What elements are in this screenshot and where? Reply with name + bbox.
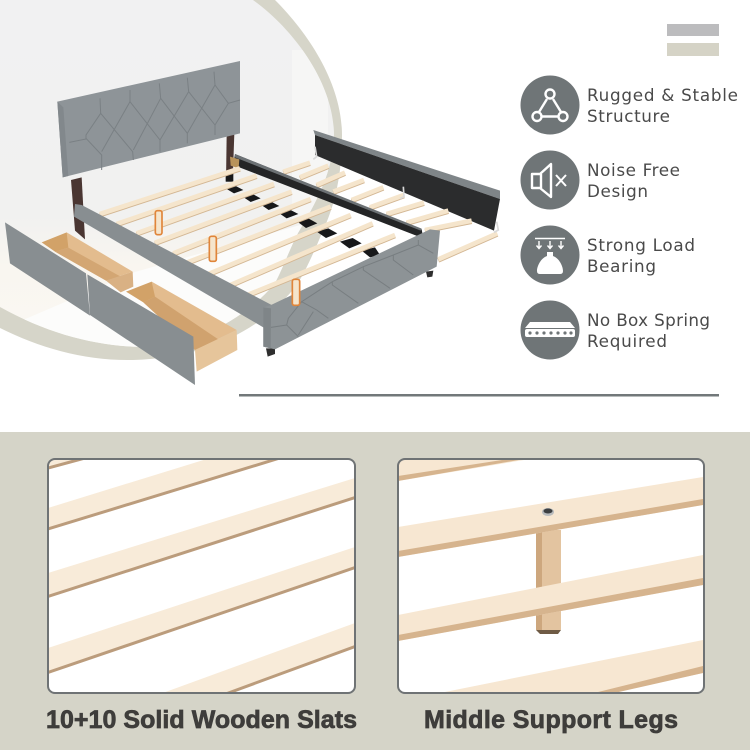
middle support leg outlines bbox=[155, 211, 300, 305]
horizontal rule bbox=[239, 394, 719, 396]
icon: mattress bbox=[520, 300, 580, 360]
near half slats bbox=[100, 168, 395, 297]
far side rail bbox=[313, 130, 500, 231]
footboard bbox=[263, 229, 440, 349]
panel: wooden slats bbox=[48, 457, 355, 694]
label: Noise Free bbox=[587, 160, 680, 180]
label: Strong Load bbox=[587, 235, 695, 255]
decorative backdrop circle bbox=[0, 0, 342, 360]
right drawer bbox=[87, 274, 237, 385]
middle rail bbox=[230, 154, 423, 238]
feature: rugged and stable bbox=[520, 76, 738, 134]
headboard bbox=[57, 61, 240, 177]
label: Rugged & Stable bbox=[587, 85, 738, 105]
label: Bearing bbox=[587, 256, 656, 276]
near side rail bbox=[74, 204, 272, 328]
far rail brackets bbox=[313, 147, 498, 232]
caption: wooden slats: 10+10 Solid Wooden Slats bbox=[46, 706, 357, 734]
bed illustration bbox=[5, 61, 500, 385]
rear foot bbox=[426, 271, 433, 277]
left headboard post bbox=[71, 177, 85, 239]
icon: muted speaker bbox=[520, 150, 580, 210]
rug bbox=[23, 225, 318, 350]
feature: load bearing bbox=[520, 226, 695, 284]
support leg bbox=[536, 530, 561, 634]
feature: noise free bbox=[520, 150, 680, 210]
bolt bbox=[542, 508, 554, 516]
colour swatches bbox=[667, 24, 719, 56]
label: Design bbox=[587, 181, 648, 201]
label: Structure bbox=[587, 106, 670, 126]
label: Required bbox=[587, 331, 667, 351]
left drawer bbox=[5, 222, 133, 316]
feature: no box spring bbox=[520, 300, 710, 360]
middle rail support blocks bbox=[226, 173, 380, 257]
right headboard post bbox=[226, 133, 234, 182]
far half slats bbox=[283, 163, 497, 260]
label: No Box Spring bbox=[587, 310, 710, 330]
icon: triangle structure bbox=[520, 76, 580, 134]
bottom band bbox=[0, 432, 750, 750]
panel: support legs bbox=[398, 458, 704, 694]
icon: load weight bbox=[520, 226, 580, 284]
front foot bbox=[266, 348, 275, 357]
caption: support legs: Middle Support Legs bbox=[424, 706, 678, 734]
